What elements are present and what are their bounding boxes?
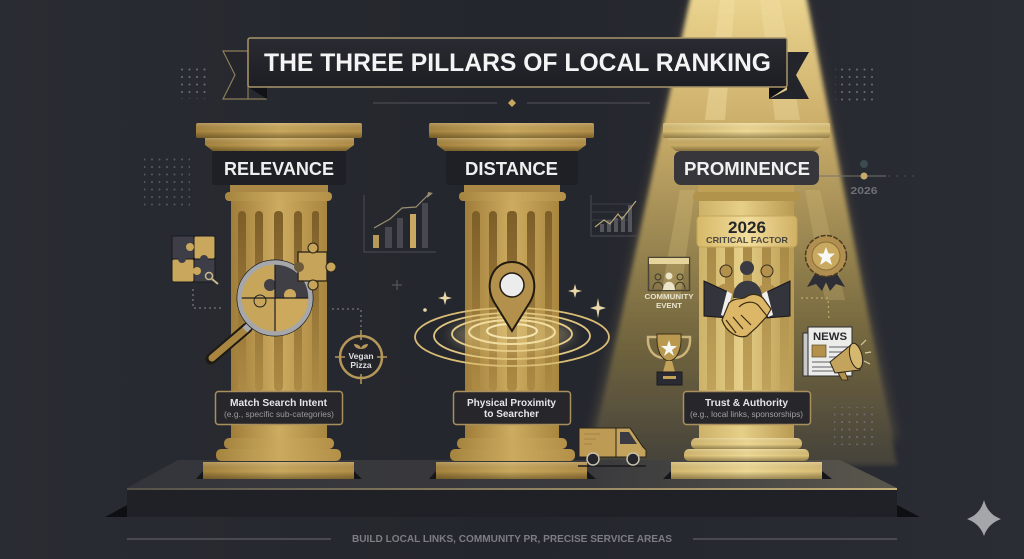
dotted connector: medal to news [801,298,829,320]
spotlight beam [590,0,897,465]
platform [105,460,920,517]
caption: trust and authority: Trust & Authority [705,398,788,409]
icon: proximity rings [415,308,609,366]
icon: newspaper [803,327,852,376]
icon: megaphone [830,340,871,380]
caption: match search intent: Match Search Intent [230,398,328,409]
caption: trust and authority [684,392,810,424]
title banner [223,38,809,99]
caption: match search intent [216,392,342,424]
caption: match search intent: (e.g., specific sub-categories) [224,409,334,419]
caption: trust and authority: (e.g., local links, sponsorships) [690,409,803,419]
pillar: distance [429,123,594,479]
timeline marker: 2026: 2026 [850,186,878,197]
icon: people behind handshake [715,261,778,298]
icon: delivery van [578,428,646,466]
icon: newspaper: NEWS [813,331,847,343]
heading: prominence [674,151,819,185]
icon: medal [806,236,846,291]
icon: corner sparkle [967,500,1001,536]
label: community event: COMMUNITY [644,294,694,301]
icon: location pin [490,262,534,331]
footer line: left [127,538,331,540]
chart: trend line [591,195,638,236]
heading: prominence: PROMINENCE [684,158,810,179]
icon: vegan pizza target [335,330,387,384]
footer text: BUILD LOCAL LINKS, COMMUNITY PR, PRECISE SERVICE AREAS [352,534,672,545]
icon: handshake [704,281,790,337]
pillar: prominence [663,123,830,479]
badge: 2026 critical factor: 2026 [728,219,766,237]
title text: THE THREE PILLARS OF LOCAL RANKING [264,49,771,77]
plus mark [392,280,402,290]
puzzle piece [294,243,336,290]
heading: distance [446,151,578,185]
badge: 2026 critical factor: CRITICAL FACTOR [706,235,788,245]
icon: community event [644,258,694,310]
decorative dot grid: top right [835,63,877,101]
title divider [373,99,650,107]
icon: small puzzle [172,236,218,284]
decorative dot grid: lower right [834,407,876,445]
icon: trophy [648,334,690,385]
caption: physical proximity [454,392,570,424]
heading: relevance [212,151,346,185]
label: community event: EVENT [656,303,683,310]
icon: vegan pizza target: Vegan [348,351,374,361]
label: community event [644,294,694,310]
pillar: relevance [196,123,362,479]
icon: magnifying glass with puzzle [211,243,336,359]
icon: vegan pizza target: Pizza [350,360,372,370]
decorative dot grid: left [144,158,190,208]
badge: 2026 critical factor [697,216,797,247]
dotted connector: right [332,309,361,330]
caption: physical proximity: to Searcher [484,409,539,420]
decorative dot grid: top left [178,66,211,99]
chart: rising bars [364,192,436,252]
sparkles [423,284,606,318]
dotted connector: left [193,289,224,308]
timeline marker: 2026 [819,160,916,197]
heading: relevance: RELEVANCE [224,158,334,179]
caption: physical proximity: Physical Proximity [467,398,556,409]
heading: distance: DISTANCE [465,158,558,179]
footer line: right [693,538,897,540]
